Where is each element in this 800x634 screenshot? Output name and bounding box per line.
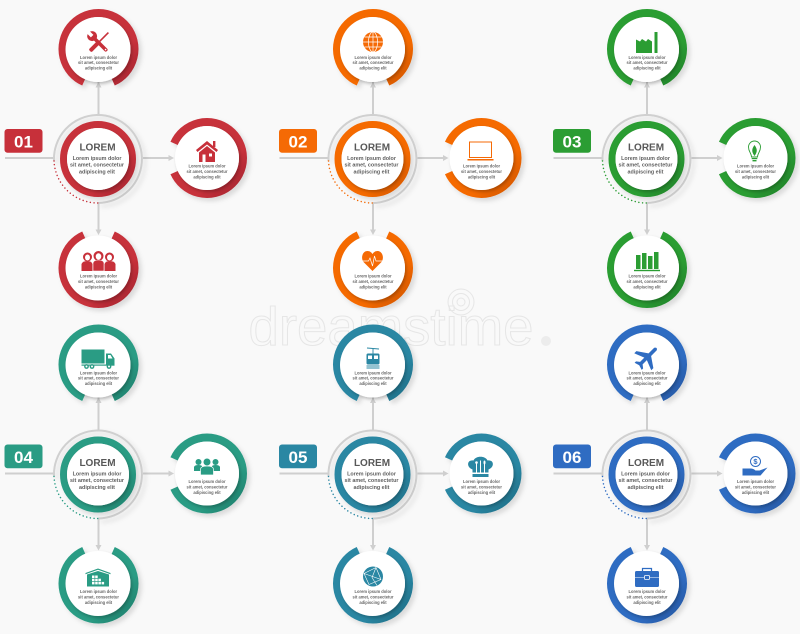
panel: group 02 — [279, 13, 517, 304]
satellite: chef hat: sit amet, consectetur — [461, 484, 502, 490]
central circle: sit amet, consectetur — [345, 478, 399, 484]
central circle: adipiscing elit — [354, 485, 390, 491]
number badge 04: 04 — [14, 448, 33, 467]
connector lines — [5, 81, 174, 235]
satellite: factory: sit amet, consectetur — [627, 60, 668, 65]
central circle: Lorem ipsum dolor — [73, 472, 122, 478]
satellite: people: Lorem ipsum dolor — [80, 274, 117, 279]
satellite: team — [174, 438, 243, 510]
panel: group 05 — [279, 329, 517, 619]
central circle: LOREM — [79, 458, 116, 469]
satellite: cable car: adipiscing elit — [359, 381, 387, 386]
number badge 06 — [553, 444, 591, 468]
satellite: people: sit amet, consectetur — [78, 279, 119, 284]
satellite: briefcase — [611, 551, 683, 619]
central circle: sit amet, consectetur — [70, 163, 125, 169]
central circle — [54, 431, 142, 518]
icon: wrench and screwdriver — [84, 28, 111, 55]
satellite: globe: Lorem ipsum dolor — [354, 55, 392, 60]
number badge 03: 03 — [563, 132, 581, 152]
number badge 02: 02 — [289, 132, 307, 152]
satellite: bar chart: adipiscing elit — [633, 284, 661, 289]
satellite: cable car: Lorem ipsum dolor — [354, 370, 392, 375]
satellite: bulb: Lorem ipsum dolor — [737, 164, 774, 169]
central circle: LOREM — [628, 458, 664, 469]
connector lines — [280, 396, 448, 550]
icon: hand holding coin: $ — [753, 457, 758, 466]
icon: briefcase — [635, 568, 659, 587]
satellite: airplane: adipiscing elit — [633, 381, 661, 386]
satellite: cable car: sit amet, consectetur — [353, 376, 394, 381]
satellite: money in hand — [723, 438, 791, 510]
central circle: adipiscing elit — [79, 169, 115, 175]
satellite: team: sit amet, consectetur — [187, 484, 228, 490]
satellite: heart — [337, 235, 409, 304]
satellite: network globe: adipiscing elit — [359, 600, 387, 605]
number badge 03 — [553, 129, 591, 153]
central circle — [328, 431, 416, 518]
satellite: money in hand: sit amet, consectetur — [735, 484, 776, 490]
satellite: heart: sit amet, consectetur — [353, 279, 394, 284]
satellite: factory: adipiscing elit — [633, 66, 661, 71]
number badge 01: 01 — [14, 132, 33, 152]
satellite: briefcase: adipiscing elit — [633, 600, 661, 605]
satellite: money in hand: Lorem ipsum dolor — [737, 479, 774, 484]
satellite: globe: adipiscing elit — [359, 66, 387, 71]
central circle: Lorem ipsum dolor — [621, 156, 671, 162]
panel: group 03 — [553, 13, 791, 304]
satellite: chef hat: Lorem ipsum dolor — [463, 479, 500, 484]
icon: bar chart — [634, 252, 660, 271]
satellite: tools — [62, 13, 134, 82]
satellite: briefcase: Lorem ipsum dolor — [628, 589, 666, 594]
panel: group 06 — [553, 329, 791, 619]
number badge 04 — [4, 444, 42, 468]
satellite: laptop: adipiscing elit — [468, 174, 496, 179]
satellite: bar chart: sit amet, consectetur — [627, 279, 668, 284]
satellite: home: adipiscing elit — [193, 174, 221, 179]
satellite: heart: adipiscing elit — [359, 284, 387, 289]
number badge 02 — [279, 129, 317, 153]
satellite: warehouse: Lorem ipsum dolor — [80, 589, 117, 594]
satellite: airplane: Lorem ipsum dolor — [628, 370, 666, 375]
central circle — [602, 115, 690, 203]
central circle: LOREM — [79, 143, 116, 154]
satellite: people: adipiscing elit — [85, 284, 113, 289]
central circle: sit amet, consectetur — [619, 163, 673, 169]
panel: group 04 — [4, 329, 243, 619]
satellite: home — [174, 122, 243, 194]
satellite: warehouse: adipiscing elit — [85, 600, 113, 605]
satellite: briefcase: sit amet, consectetur — [627, 594, 668, 600]
central circle: LOREM — [628, 143, 664, 154]
satellite: factory — [611, 13, 683, 82]
icon: network globe — [363, 566, 383, 586]
satellite: people — [62, 235, 134, 304]
satellite: cable car — [337, 329, 409, 398]
satellite: tools: Lorem ipsum dolor — [80, 55, 117, 60]
central circle — [602, 431, 690, 518]
satellite: truck: adipiscing elit — [85, 381, 113, 386]
connector lines — [280, 81, 448, 235]
satellite: home: sit amet, consectetur — [187, 169, 228, 174]
panel: group 01 — [4, 13, 243, 304]
satellite: bulb: adipiscing elit — [742, 174, 770, 179]
connector lines — [554, 81, 722, 235]
satellite: factory: Lorem ipsum dolor — [628, 55, 666, 60]
central circle — [328, 115, 416, 203]
satellite: bulb — [723, 122, 791, 194]
central circle: Lorem ipsum dolor — [347, 472, 397, 478]
satellite: chef hat — [449, 438, 517, 510]
icon: warehouse — [86, 568, 110, 586]
satellite: bulb: sit amet, consectetur — [735, 169, 776, 174]
icon: light bulb — [748, 141, 760, 161]
satellite: warehouse — [62, 551, 134, 619]
watermark: dreamstime — [248, 297, 534, 357]
number badge 06: 06 — [563, 448, 581, 467]
number badge 01 — [4, 129, 42, 153]
central circle: sit amet, consectetur — [70, 478, 125, 484]
central circle: adipiscing elit — [628, 485, 664, 491]
satellite: laptop: sit amet, consectetur — [461, 169, 502, 174]
satellite: globe: sit amet, consectetur — [353, 60, 394, 65]
central circle: sit amet, consectetur — [619, 478, 673, 484]
number badge 05: 05 — [289, 448, 307, 467]
central circle: adipiscing elit — [628, 169, 664, 175]
satellite: truck: sit amet, consectetur — [78, 376, 119, 381]
satellite: tools: sit amet, consectetur — [78, 60, 119, 65]
satellite: airplane: sit amet, consectetur — [627, 376, 668, 381]
satellite: heart: Lorem ipsum dolor — [354, 274, 392, 279]
satellite: bar chart — [611, 235, 683, 304]
icon: airplane — [630, 339, 665, 375]
icon: truck — [82, 350, 114, 369]
satellite: truck — [62, 329, 134, 398]
icon: three people — [82, 251, 116, 271]
icon: cable car — [366, 348, 380, 368]
satellite: team: adipiscing elit — [193, 490, 221, 495]
icon: heart with pulse — [362, 251, 383, 271]
satellite: bar chart: Lorem ipsum dolor — [628, 274, 666, 279]
satellite: network globe: sit amet, consectetur — [353, 594, 394, 600]
satellite: home: Lorem ipsum dolor — [188, 164, 226, 169]
satellite: team: Lorem ipsum dolor — [188, 479, 226, 484]
central circle: LOREM — [354, 458, 390, 469]
icon: factory — [636, 32, 658, 53]
satellite: money in hand: adipiscing elit — [742, 490, 770, 495]
icon: laptop — [468, 142, 494, 160]
central circle: Lorem ipsum dolor — [73, 156, 122, 162]
connector lines — [5, 396, 174, 550]
satellite: laptop — [449, 122, 517, 194]
icon: team of three — [194, 458, 220, 475]
satellite: warehouse: sit amet, consectetur — [78, 594, 119, 600]
icon: globe — [363, 32, 383, 52]
icon: chef hat with cutlery — [468, 457, 493, 477]
satellite: globe — [337, 13, 409, 82]
central circle: Lorem ipsum dolor — [347, 156, 397, 162]
satellite: truck: Lorem ipsum dolor — [80, 370, 117, 375]
satellite: tools: adipiscing elit — [85, 66, 113, 71]
central circle: Lorem ipsum dolor — [621, 472, 671, 478]
central circle: sit amet, consectetur — [345, 163, 399, 169]
central circle: adipiscing elit — [354, 169, 390, 175]
icon: house — [196, 141, 218, 162]
satellite: network globe: Lorem ipsum dolor — [354, 589, 392, 594]
central circle: LOREM — [354, 143, 390, 154]
central circle: adipiscing elit — [79, 485, 115, 491]
central circle — [54, 115, 142, 203]
satellite: chef hat: adipiscing elit — [468, 490, 496, 495]
connector lines — [554, 396, 722, 550]
satellite: network globe — [337, 551, 409, 619]
satellite: laptop: Lorem ipsum dolor — [463, 164, 500, 169]
satellite: airplane — [611, 329, 683, 398]
number badge 05 — [279, 444, 317, 468]
